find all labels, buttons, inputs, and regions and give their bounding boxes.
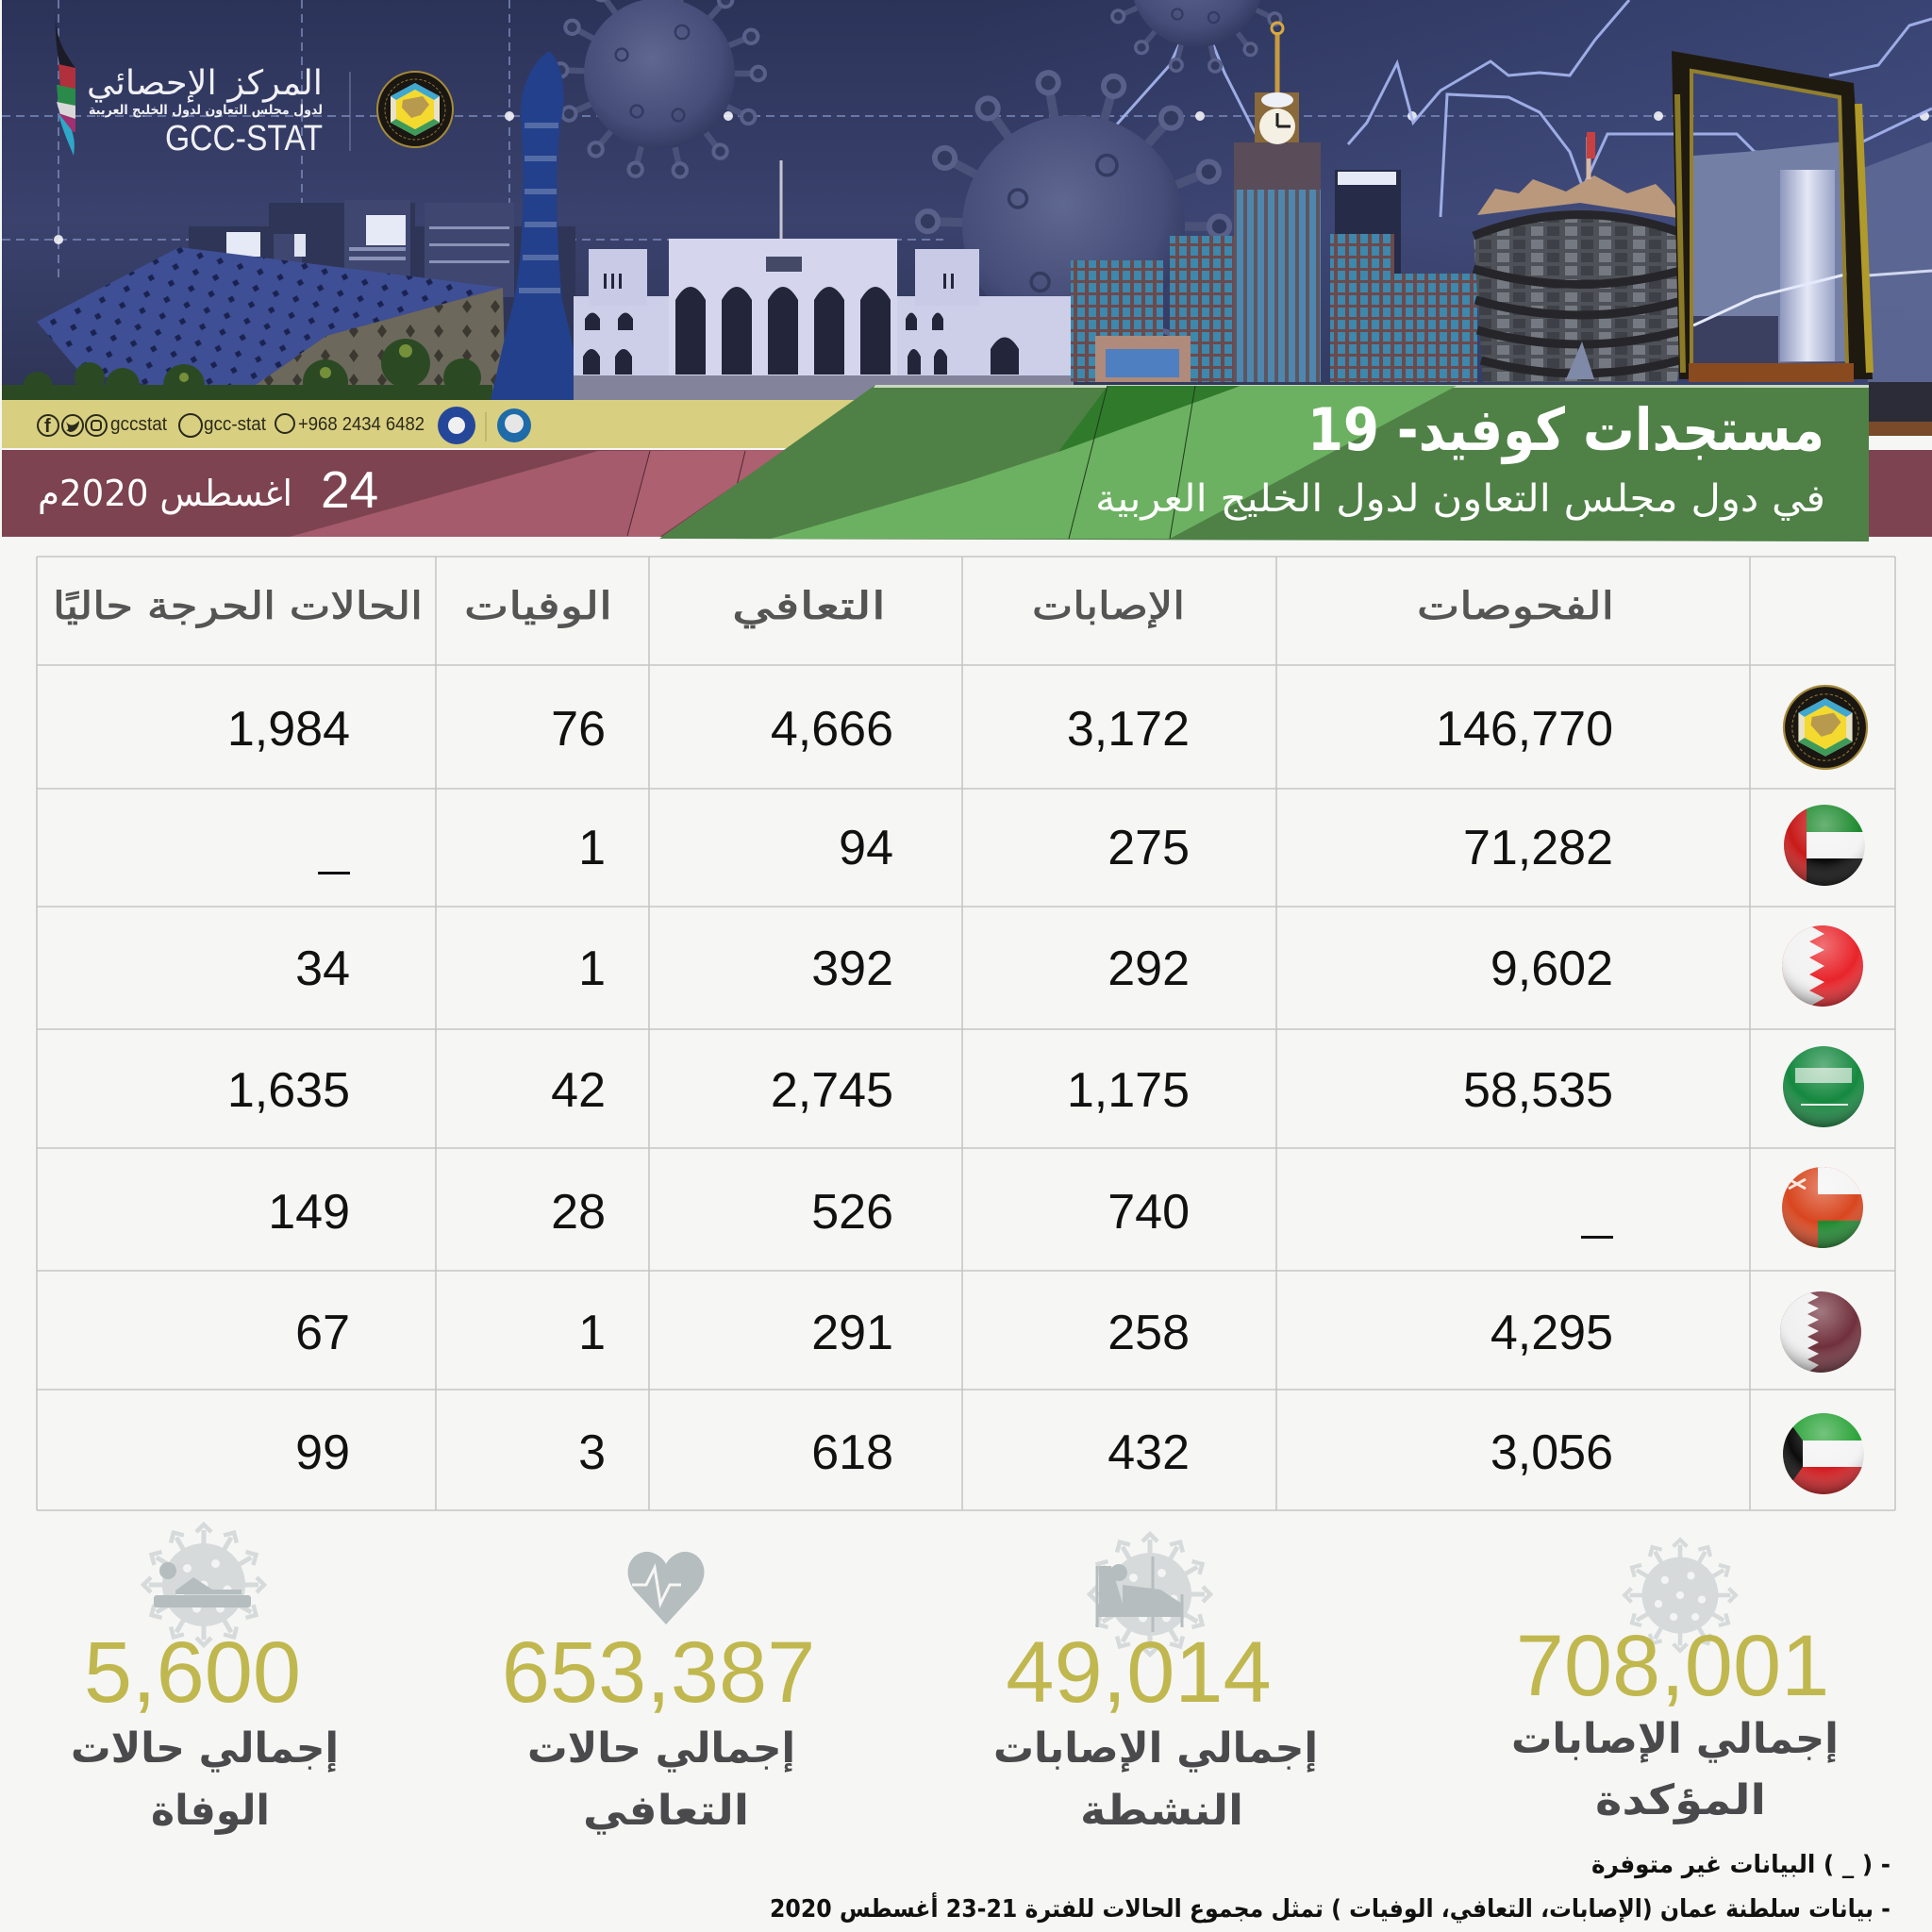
row: Qatar: [295, 1306, 1613, 1360]
row: Oman: 740: [1108, 1185, 1190, 1240]
chart lines: [1083, 0, 1932, 311]
column headers: الفحوصات: [1417, 585, 1614, 628]
row: Saudi Arabia: 42: [551, 1063, 606, 1118]
row: Saudi Arabia: 2,745: [771, 1063, 893, 1118]
row: Bahrain: 9,602: [1491, 941, 1613, 996]
date band: [2, 450, 1932, 537]
building: round tower: [1474, 132, 1689, 382]
GCC emblem: [377, 72, 453, 147]
stat: active cases: [993, 1534, 1318, 1835]
row: Saudi Arabia: [227, 1063, 1613, 1118]
row: Bahrain: 34: [295, 941, 350, 996]
row: Oman: [268, 1185, 1613, 1240]
row: UAE: 71,282: [1463, 821, 1613, 875]
stat: recovered cases: التعافي: [583, 1787, 749, 1835]
row: GCC total: 146,770: [1436, 702, 1613, 757]
building: Oman opera house: [574, 160, 1074, 401]
building: Qatar torch: [491, 51, 583, 400]
stat: deaths: الوفاة: [151, 1787, 270, 1835]
banner: skyline illustration: [2, 0, 1932, 436]
row: Saudi Arabia: 1,175: [1067, 1063, 1190, 1118]
row: Kuwait: [295, 1425, 1613, 1480]
row: Qatar: 258: [1108, 1306, 1190, 1360]
contact band: [2, 400, 915, 448]
stat: recovered cases: 653,387: [502, 1624, 815, 1721]
contact band: gcc-stat: [204, 414, 266, 435]
icon: heart with pulse: [628, 1552, 704, 1624]
row: UAE: 275: [1108, 821, 1190, 875]
row: Kuwait: 3,056: [1491, 1425, 1613, 1480]
table grid: [37, 557, 1895, 1510]
footnotes: - ( _ ) البيانات غير متوفرة: [1591, 1851, 1890, 1879]
column headers: الوفيات: [464, 585, 612, 628]
contact band: gccstat: [110, 414, 167, 435]
stat: confirmed cases: 708,001: [1516, 1618, 1829, 1714]
row: Bahrain: 392: [811, 941, 893, 996]
building: Dubai frame: [1672, 51, 1873, 382]
data table: [37, 557, 1895, 1510]
row: GCC total: [227, 702, 1613, 757]
logo text: المركز الإحصائي: [87, 64, 323, 103]
contact band: f: [44, 416, 51, 437]
row: GCC total: 1,984: [227, 702, 350, 757]
row: Saudi Arabia: 58,535: [1463, 1063, 1613, 1118]
icon: patient on hospital bed: [1090, 1534, 1210, 1655]
stat: deaths: إجمالي حالات: [71, 1724, 339, 1773]
row: GCC total: 76: [551, 702, 606, 757]
date band: اغسطس 2020م: [38, 473, 292, 514]
stat: deaths: [71, 1524, 339, 1835]
flag: Oman: [1782, 1167, 1863, 1248]
row: Qatar: 4,295: [1491, 1306, 1613, 1360]
row: Saudi Arabia: 1,635: [227, 1063, 350, 1118]
row: GCC total: 4,666: [771, 702, 893, 757]
certification badges: [438, 407, 531, 444]
date: 24: [321, 460, 378, 519]
stat: confirmed cases: المؤكدة: [1595, 1776, 1766, 1824]
logo: GCC-STAT: [56, 11, 453, 158]
subtitle: في دول مجلس التعاون لدول الخليج العربية: [1095, 477, 1825, 521]
row: Kuwait: 99: [295, 1425, 350, 1480]
icon: virus: [1624, 1540, 1736, 1651]
buildings: Makkah towers: [1071, 23, 1477, 382]
stat: active cases: 49,014: [1006, 1624, 1272, 1721]
stat: deaths: 5,600: [84, 1624, 301, 1721]
stat: recovered cases: إجمالي حالات: [527, 1724, 795, 1773]
column headers: الإصابات: [1032, 585, 1185, 628]
row: Qatar: 291: [811, 1306, 893, 1360]
row: Kuwait: 432: [1108, 1425, 1190, 1480]
logo: GCC-STAT: GCC-STAT: [165, 119, 323, 158]
stat: confirmed cases: [1511, 1540, 1839, 1824]
building: Kuwait cultural centre: [2, 247, 506, 406]
contact icons and handles: [38, 414, 294, 437]
footnotes: [770, 1851, 1890, 1924]
row: Oman: 526: [811, 1185, 893, 1240]
stat: confirmed cases: إجمالي الإصابات: [1511, 1715, 1839, 1763]
row: Kuwait: 618: [811, 1425, 893, 1480]
flag: Bahrain: [1782, 925, 1863, 1007]
icon: GCC emblem: [1784, 686, 1867, 769]
row: Oman: 28: [551, 1185, 606, 1240]
row: UAE: 1: [578, 821, 606, 875]
stat: active cases: إجمالي الإصابات: [993, 1724, 1318, 1773]
stat: active cases: النشطة: [1080, 1787, 1243, 1835]
row: UAE: 94: [839, 821, 893, 875]
logo: GCC-STAT: لدول مجلس التعاون لدول الخليج العربية: [89, 103, 323, 118]
title: مستجدات كوفيد- 19: [1307, 395, 1824, 464]
row: UAE: [318, 821, 1613, 875]
flag: Saudi Arabia: [1783, 1046, 1864, 1127]
contact band: +968 2434 6482: [298, 414, 425, 435]
virus particles: [554, 0, 1290, 381]
flag: Qatar: [1780, 1291, 1861, 1373]
stat: recovered cases: [502, 1552, 815, 1835]
row: Qatar: 1: [578, 1306, 606, 1360]
row: Bahrain: [295, 941, 1613, 996]
row: Kuwait: 3: [578, 1425, 606, 1480]
flag: UAE: [1784, 805, 1865, 886]
icon: patient on mat: [143, 1524, 264, 1645]
background city: [189, 170, 1401, 377]
column headers: [53, 585, 1614, 628]
flag: Kuwait: [1783, 1413, 1864, 1494]
column headers: الحالات الحرجة حاليًا: [53, 585, 423, 628]
row: Bahrain: 292: [1108, 941, 1190, 996]
column headers: التعافي: [732, 585, 886, 628]
logo ribbon: [56, 11, 75, 156]
row: GCC total: 3,172: [1067, 702, 1190, 757]
title panel: [659, 385, 1869, 541]
row: Bahrain: 1: [578, 941, 606, 996]
row: Oman: 149: [268, 1185, 350, 1240]
row: Qatar: 67: [295, 1306, 350, 1360]
